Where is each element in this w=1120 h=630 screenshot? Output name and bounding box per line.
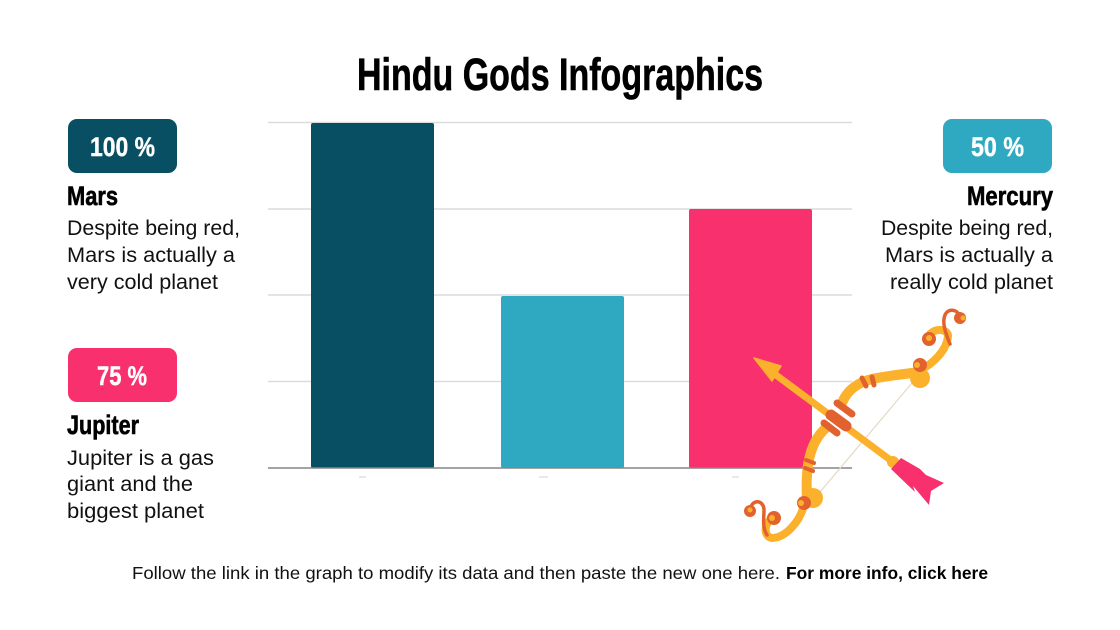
panel: Mars <box>67 119 240 294</box>
bar: Mercury <box>501 296 624 468</box>
text: Jupiter description <box>67 447 214 523</box>
text: Mercury description <box>881 217 1053 294</box>
badge: 50 % <box>943 119 1052 173</box>
footer note: Follow the link in the graph to modify its data and then paste the new one here. <box>132 563 780 583</box>
text: Mercury description: really cold planet <box>890 271 1053 294</box>
text: Mars description <box>67 217 240 294</box>
badge: 50 %: 50 % <box>971 132 1024 162</box>
text: Mercury description: Mars is actually a <box>885 244 1053 267</box>
text: Mars description: Despite being red, <box>67 217 240 240</box>
bow limbs <box>766 330 948 538</box>
bow grip bands <box>805 377 874 471</box>
text: Jupiter description: giant and the <box>67 473 193 496</box>
text: Mars description: Mars is actually a <box>67 244 235 267</box>
text: Jupiter description: biggest planet <box>67 500 204 523</box>
panel: Mercury <box>881 119 1053 294</box>
text: Mars description: very cold planet <box>67 271 218 294</box>
heading: Mars: Mars <box>67 181 118 211</box>
badge: 75 %: 75 % <box>97 361 147 391</box>
heading: Mercury: Mercury <box>967 181 1053 211</box>
bow tips <box>744 310 966 535</box>
bow string <box>820 383 912 492</box>
bar: Mars <box>311 123 434 468</box>
text: Jupiter description: Jupiter is a gas <box>67 447 214 470</box>
footer note: For more info, click here <box>786 563 988 583</box>
panel: Jupiter <box>67 348 214 523</box>
arrow <box>754 358 944 505</box>
title: Hindu Gods Infographics <box>357 49 763 100</box>
bar: Jupiter <box>689 209 812 468</box>
bar chart <box>268 122 852 478</box>
icon: bow and arrow <box>744 310 966 538</box>
badge: 100 % <box>68 119 177 173</box>
badge: 100 %: 100 % <box>90 132 155 162</box>
heading: Jupiter: Jupiter <box>67 410 139 440</box>
badge: 75 % <box>68 348 177 402</box>
text: Mercury description: Despite being red, <box>881 217 1053 240</box>
